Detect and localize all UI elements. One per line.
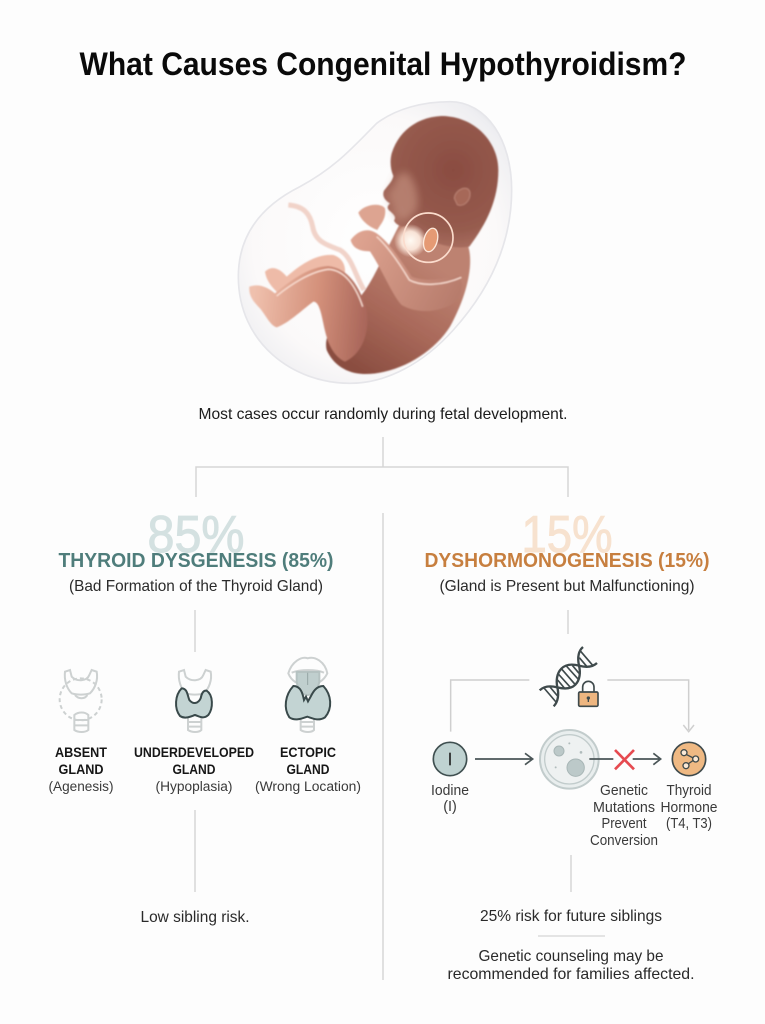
icon: underdeveloped gland: [176, 670, 212, 732]
ear: [454, 188, 470, 205]
label: iodine: [431, 783, 469, 815]
label: underdeveloped gland: GLAND: [172, 762, 216, 777]
icon: iodine: [433, 742, 467, 776]
icon: thyroid hormone: [672, 742, 706, 776]
label: ectopic gland: (Wrong Location): [255, 779, 361, 795]
caption: Most cases occur randomly during fetal development.: [198, 406, 568, 423]
icon: dna with lock: [540, 647, 598, 706]
label: genetic mutations: Mutations: [593, 800, 655, 816]
label: genetic mutations: Genetic: [600, 783, 648, 799]
label: absent gland: [48, 745, 114, 795]
thyroid glow circle: [394, 213, 453, 262]
label: underdeveloped gland: [134, 745, 254, 795]
arm and hand: [351, 230, 462, 311]
title: What Causes Congenital Hypothyroidism?: [80, 46, 686, 82]
torso: [326, 223, 470, 374]
pathway diagram: [433, 647, 706, 789]
near leg and foot: [249, 266, 367, 362]
label: ectopic gland: ECTOPIC: [280, 745, 336, 760]
icon: red cross: [615, 750, 634, 769]
label: genetic mutations: Conversion: [590, 833, 658, 849]
label: thyroid hormone: Hormone: [660, 800, 718, 816]
label: ectopic gland: [255, 745, 361, 795]
subtitle: (Bad Formation of the Thyroid Gland): [69, 578, 323, 595]
label: thyroid hormone: Thyroid: [666, 783, 712, 799]
arrow: into hormone: [683, 725, 694, 732]
label: absent gland: (Agenesis): [48, 779, 114, 795]
icon: cell: [540, 730, 599, 789]
label: iodine: (I): [443, 799, 457, 815]
label: absent gland: ABSENT: [55, 745, 108, 760]
label: genetic mutations: [590, 783, 658, 849]
big 15 percent: 15%: [522, 506, 612, 564]
branching connector lines: [196, 437, 568, 980]
panel: thyroid dysgenesis: [48, 506, 361, 926]
subtitle: (Gland is Present but Malfunctioning): [440, 578, 694, 595]
icon: ectopic gland: [286, 658, 330, 732]
big 85 percent: 85%: [148, 506, 244, 564]
icon: absent gland: [60, 670, 102, 732]
note: genetic counseling: recommended for families affected.: [448, 966, 694, 983]
illustration: fetus in amniotic sac: [238, 102, 512, 383]
head: [383, 116, 498, 247]
arrow: blocked conversion: [589, 753, 661, 765]
label: genetic mutations: Prevent: [602, 816, 646, 832]
label: thyroid hormone: (T4, T3): [666, 816, 712, 832]
note: genetic counseling: [448, 948, 694, 983]
far leg and foot: [265, 255, 345, 300]
heading: thyroid dysgenesis: THYROID DYSGENESIS (85%): [58, 550, 334, 572]
umbilical cord: [288, 205, 364, 290]
note: sibling risk: 25% risk for future siblings: [480, 908, 662, 925]
label: ectopic gland: GLAND: [286, 762, 330, 777]
face highlight: [389, 172, 418, 220]
note: genetic counseling: Genetic counseling may be: [478, 948, 664, 965]
label: underdeveloped gland: UNDERDEVELOPED: [134, 745, 254, 760]
panel: dyshormonogenesis: [424, 506, 718, 983]
label: absent gland: GLAND: [58, 762, 104, 777]
heading: dyshormonogenesis: DYSHORMONOGENESIS (15%): [424, 550, 710, 572]
upper hand: [358, 205, 385, 230]
note: low sibling risk: Low sibling risk.: [140, 909, 250, 926]
label: underdeveloped gland: (Hypoplasia): [156, 779, 232, 795]
label: thyroid hormone: [660, 783, 718, 832]
label: iodine: Iodine: [431, 783, 469, 799]
arrow: iodine to cell: [475, 753, 533, 765]
